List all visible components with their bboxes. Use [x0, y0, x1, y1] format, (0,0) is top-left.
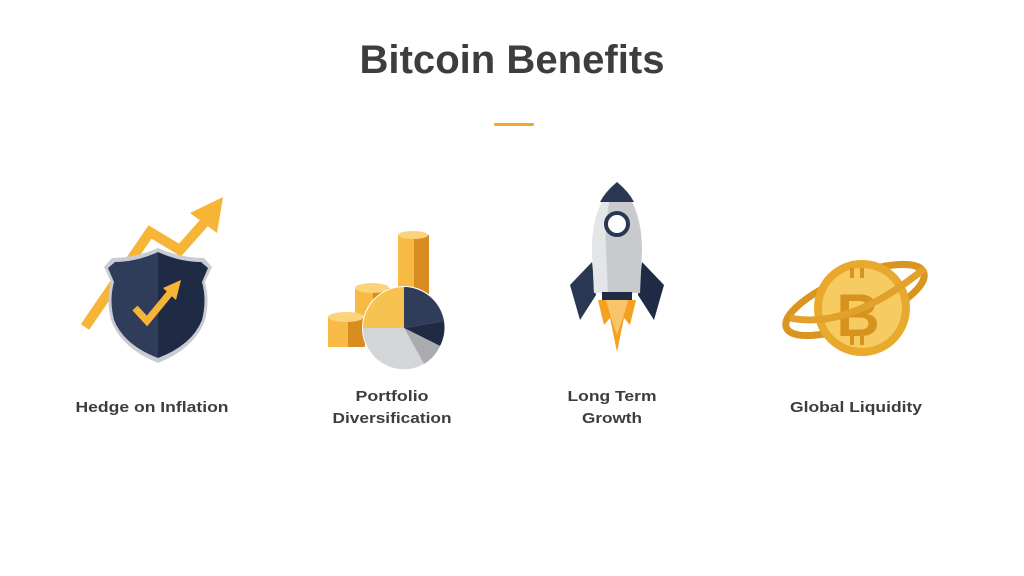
- title underline accent: [494, 123, 534, 126]
- icon: bars and pie chart: [328, 231, 446, 370]
- label: Hedge on Inflation: Hedge on Inflation: [76, 399, 228, 416]
- title: Bitcoin Benefits: [360, 38, 664, 82]
- icon: shield with rising arrow: [85, 197, 223, 363]
- label: Portfolio Diversification: Portfolio: [356, 388, 428, 405]
- icon: rocket: [570, 182, 664, 352]
- label: Global Liquidity: Global Liquidity: [790, 399, 923, 416]
- text: Diversification: [332, 410, 452, 427]
- label: Long Term Growth: Long Term: [568, 388, 656, 405]
- icon: bitcoin coin with orbit: [777, 250, 933, 356]
- text: Growth: [582, 410, 642, 427]
- icon: bitcoin coin with orbit: B: [836, 282, 880, 349]
